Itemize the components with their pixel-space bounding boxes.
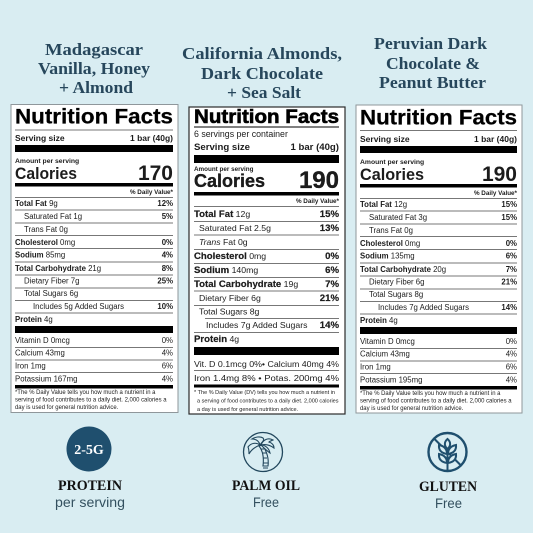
heading: Madagascar Vanilla, Honey + Almond: Vanilla, Honey (38, 59, 151, 78)
footnote: *The % Daily Value tells you how much a nutrient in a (360, 391, 501, 397)
nutrition rows: 1 bar (40g) (474, 134, 517, 144)
footnote: * The % Daily Value (DV) tells you how much a nutrient in (194, 390, 335, 396)
nutrition rows: Protein 4g (360, 316, 398, 325)
heading: Peruvian Dark Chocolate & Peanut Butter (374, 34, 488, 92)
nutrition rows (15, 133, 174, 384)
footnote: *The % Daily Value tells you how much a nutrient in a (15, 390, 156, 396)
label: gluten free: Free (435, 495, 462, 511)
serving information: Serving size (194, 142, 250, 153)
nutrition rows: 14% (320, 320, 339, 331)
footnote (15, 390, 167, 411)
nutrition rows: Iron 1mg (360, 362, 391, 372)
serving information: 6 servings per container (194, 129, 288, 139)
nutrition rows: Total Sugars 8g (199, 306, 260, 316)
nutrition rows: 14% (501, 303, 517, 312)
nutrition rows: 0% (162, 238, 173, 247)
label: gluten free (419, 479, 477, 511)
title: Nutrition Facts: Nutrition Facts (360, 106, 517, 130)
calories (194, 166, 339, 194)
nutrition rows: Total Fat 9g (15, 199, 58, 208)
nutrition rows: 0% (325, 251, 339, 262)
nutrition rows: Dietary Fiber 6g (199, 293, 261, 303)
nutrition rows: Amount per serving (15, 158, 79, 165)
icon: gluten free wheat (428, 433, 466, 471)
label: protein per serving (55, 478, 125, 510)
calories: Amount per serving (194, 166, 254, 173)
nutrition rows: Saturated Fat 2.5g (199, 223, 271, 233)
heading: California Almonds, Dark Chocolate + Sea Salt: California Almonds, (182, 44, 342, 63)
nutrition rows: 15% (501, 213, 517, 222)
nutrition rows: Total Sugars 8g (369, 290, 423, 299)
nutrition rows: 21% (501, 278, 517, 286)
nutrition rows: Potassium 167mg (15, 374, 77, 384)
nutrition rows: Sodium 140mg (194, 265, 258, 276)
nutrition rows: Amount per serving (360, 159, 424, 166)
footnote: serving of food contributes to a daily diet. 2,000 calories a (360, 398, 512, 404)
nutrition rows: Includes 5g Added Sugars (33, 302, 124, 311)
nutrition rows: Cholesterol 0mg (360, 239, 420, 248)
nutrition rows: % Daily Value* (296, 198, 340, 205)
nutrition rows: Calories (360, 166, 424, 184)
nutrition rows: 6% (162, 362, 173, 370)
nutrition rows: 7% (325, 279, 339, 290)
nutrition rows: Sodium 85mg (15, 250, 65, 260)
panel: nutrition facts almonds dark chocolate (189, 106, 345, 414)
nutrition rows: Vitamin D 0mcg (360, 337, 415, 346)
nutrition rows: % Daily Value* (474, 190, 518, 197)
nutrition rows: 25% (157, 276, 173, 286)
badge: 2-5G protein: 2-5G (74, 443, 104, 458)
nutrition rows: Total Sugars 6g (24, 289, 78, 298)
calories: 190 (299, 167, 339, 194)
heading: California Almonds, Dark Chocolate + Sea Salt: + Sea Salt (227, 83, 301, 102)
nutrition rows: Trans Fat 0g (369, 226, 413, 235)
nutrition rows: Dietary Fiber 7g (24, 276, 79, 286)
nutrition rows: 0% (506, 239, 517, 248)
nutrition rows: 6% (506, 362, 517, 372)
nutrition rows: 21% (320, 293, 339, 304)
nutrition rows: 4% (506, 376, 517, 384)
nutrition rows: Protein 4g (194, 334, 239, 345)
nutrition rows: Total Fat 12g (360, 200, 407, 209)
nutrition rows: Total Carbohydrate 21g (15, 264, 101, 273)
label: gluten free: GLUTEN (419, 479, 477, 495)
panel: nutrition facts peruvian peanut butter (356, 105, 522, 413)
nutrition rows: 12% (157, 199, 173, 208)
nutrition rows: Potassium 195mg (360, 376, 422, 384)
footnote (194, 390, 339, 413)
label: palm oil free: PALM OIL (232, 478, 300, 494)
nutrition rows: Iron 1.4mg 8% • Potas. 200mg 4% (194, 373, 339, 383)
divider lines and bars (194, 126, 339, 388)
heading: Madagascar Vanilla, Honey + Almond (38, 40, 151, 97)
heading: Madagascar Vanilla, Honey + Almond: + Almond (59, 78, 134, 97)
heading: California Almonds, Dark Chocolate + Sea Salt (182, 44, 342, 102)
nutrition rows: Calcium 43mg (15, 348, 65, 358)
nutrition rows: Protein 4g (15, 315, 53, 324)
heading: Peruvian Dark Chocolate & Peanut Butter: Peruvian Dark (374, 34, 488, 53)
nutrition rows: 6% (325, 265, 339, 276)
nutrition rows: Vit. D 0.1mcg 0%• Calcium 40mg 4% (194, 359, 339, 369)
label: palm oil free: Free (253, 494, 279, 510)
heading: Madagascar Vanilla, Honey + Almond: Madagascar (45, 40, 143, 59)
nutrition rows: Total Carbohydrate 19g (194, 279, 298, 290)
nutrition rows: 0% (506, 337, 517, 346)
nutrition rows: Trans Fat 0g (199, 237, 248, 247)
nutrition rows: Calories (15, 165, 77, 183)
nutrition rows: 4% (162, 250, 173, 260)
footnote (360, 391, 512, 412)
label: protein per serving: PROTEIN (58, 478, 122, 494)
nutrition rows: 10% (157, 302, 173, 311)
heading: Peruvian Dark Chocolate & Peanut Butter: Peanut Butter (379, 73, 486, 92)
nutrition rows: 0% (162, 336, 173, 345)
icon: palm tree (244, 432, 282, 472)
nutrition rows: Total Fat 12g (194, 209, 250, 220)
nutrition rows: Includes 7g Added Sugars (206, 320, 308, 330)
nutrition rows: Trans Fat 0g (24, 225, 68, 234)
nutrition rows: 15% (501, 200, 517, 209)
heading: Peruvian Dark Chocolate & Peanut Butter: Chocolate & (386, 54, 480, 73)
label: protein per serving: per serving (55, 494, 125, 510)
nutrition rows: 190 (482, 163, 517, 186)
nutrition rows: 5% (162, 212, 173, 221)
nutrition rows: 4% (162, 348, 173, 358)
nutrition rows: 4% (162, 374, 173, 384)
nutrition rows: Calcium 43mg (360, 350, 410, 358)
nutrition rows: Iron 1mg (15, 362, 46, 370)
title: Nutrition Facts: Nutrition Facts (15, 104, 173, 128)
nutrition rows: Vitamin D 0mcg (15, 336, 70, 345)
serving information: 1 bar (40g) (290, 142, 339, 153)
footnote: serving of food contributes to a daily diet. 2,000 calories a (15, 398, 167, 404)
nutrition rows: Saturated Fat 1g (24, 212, 82, 221)
panel: nutrition facts vanilla honey almond (11, 104, 178, 412)
footnote: a day is used for general nutrition advice. (197, 407, 299, 413)
divider lines and bars (15, 130, 173, 388)
nutrition rows (194, 198, 340, 383)
nutrition rows: 4% (506, 350, 517, 358)
heading: California Almonds, Dark Chocolate + Sea Salt: Dark Chocolate (201, 64, 323, 83)
nutrition rows: Dietary Fiber 6g (369, 278, 424, 286)
serving information (194, 129, 339, 153)
nutrition rows: 6% (506, 252, 517, 260)
nutrition rows (360, 134, 518, 384)
footnote: day is used for general nutrition advice. (15, 405, 119, 411)
nutrition rows: Saturated Fat 3g (369, 213, 427, 222)
nutrition rows: Cholesterol 0mg (194, 251, 266, 262)
nutrition rows: 13% (320, 223, 339, 234)
nutrition rows: 8% (162, 264, 173, 273)
nutrition rows: Sodium 135mg (360, 252, 415, 260)
divider lines and bars (360, 130, 517, 390)
nutrition rows: Cholesterol 0mg (15, 238, 75, 247)
footnote: a serving of food contributes to a daily diet. 2,000 calories (197, 398, 339, 404)
nutrition rows: 170 (138, 162, 173, 185)
nutrition rows: 1 bar (40g) (130, 133, 173, 143)
label: palm oil free (232, 478, 300, 510)
nutrition rows: Total Carbohydrate 20g (360, 265, 446, 274)
nutrition rows: Includes 7g Added Sugars (378, 303, 469, 312)
nutrition rows: Serving size (15, 133, 65, 143)
nutrition rows: Serving size (360, 134, 410, 144)
nutrition rows: % Daily Value* (130, 189, 174, 196)
title: Nutrition Facts: Nutrition Facts (194, 106, 339, 128)
nutrition rows: 15% (320, 209, 339, 220)
calories: Calories (194, 171, 265, 191)
nutrition rows: 7% (506, 265, 517, 274)
badge: 2-5G protein (66, 426, 112, 472)
footnote: day is used for general nutrition advice. (360, 406, 464, 412)
